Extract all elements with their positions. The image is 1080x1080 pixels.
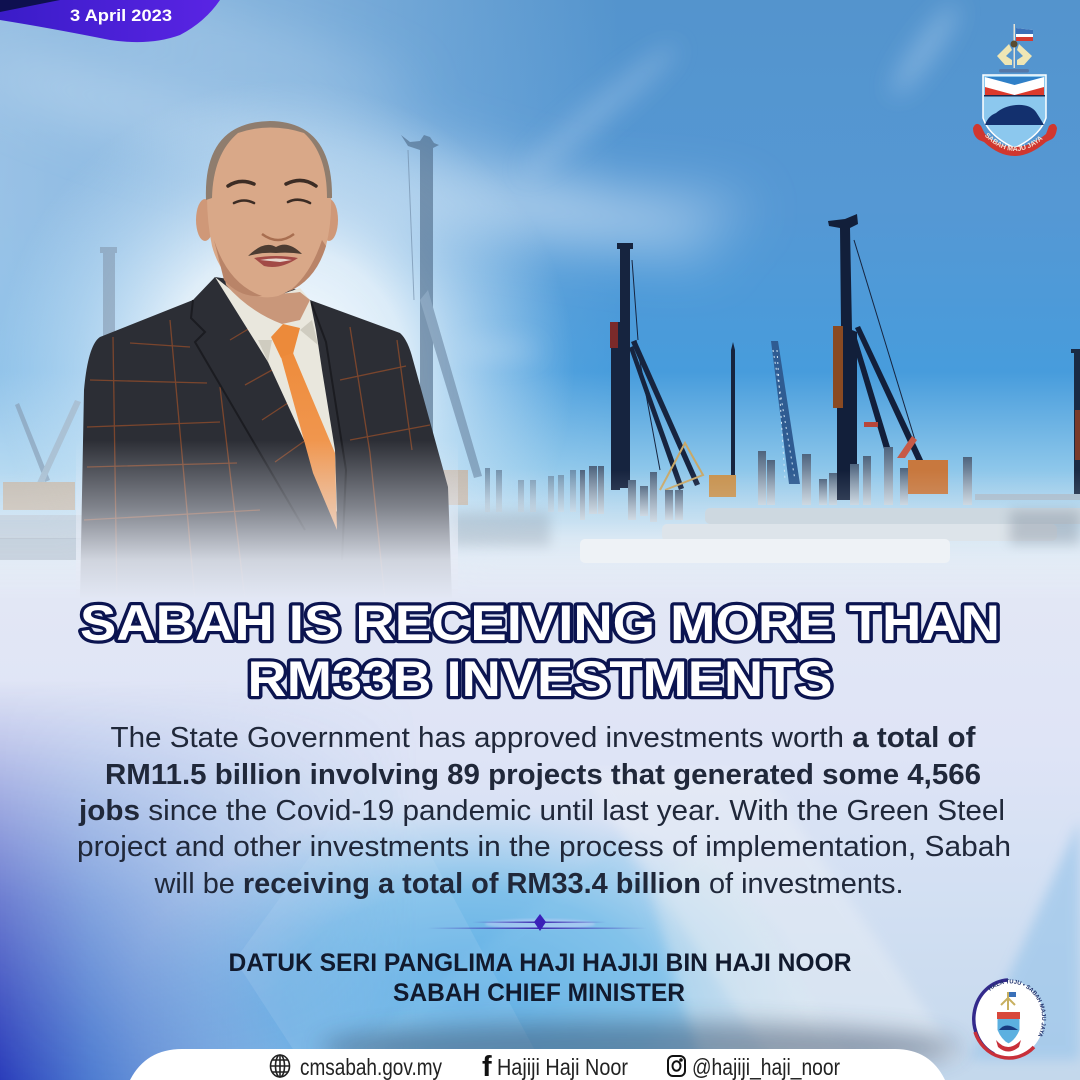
shirt xyxy=(215,277,337,512)
moustache xyxy=(248,245,302,256)
headline xyxy=(80,595,1000,707)
crane A xyxy=(611,243,735,490)
portrait of the chief minister xyxy=(76,121,458,600)
icon: instagram xyxy=(668,1056,685,1076)
construction site with faded cranes xyxy=(3,135,576,512)
ribbon with motto xyxy=(973,124,1057,156)
divider with diamond xyxy=(427,914,647,931)
body paragraph: RM11.5 billion involving 89 projects that generated some 4,566 xyxy=(105,759,981,791)
arms emblem xyxy=(997,44,1032,65)
edge crane xyxy=(1074,350,1080,500)
speaker name and title: DATUK SERI PANGLIMA HAJI HAJIJI BIN HAJI NOOR xyxy=(228,949,852,977)
Sabah state crest: SABAH MAJU JAYA xyxy=(985,133,1043,151)
body paragraph: project and other investments in the process of implementation, Sabah xyxy=(77,831,1011,863)
headline: RM33B INVESTMENTS xyxy=(248,651,832,707)
orange machine xyxy=(709,475,736,497)
body paragraph: The State Government has approved investments worth a total of xyxy=(110,722,976,754)
plaid pattern xyxy=(84,320,430,566)
Hala Tuju seal xyxy=(972,978,1046,1060)
hair xyxy=(206,121,332,200)
distant pipeline xyxy=(975,494,1080,500)
facebook name: Hajiji Haji Noor xyxy=(497,1054,628,1080)
instagram handle: @hajiji_haji_noor xyxy=(692,1054,840,1080)
body paragraph: will be receiving a total of RM33.4 billion of investments. xyxy=(154,868,904,900)
Hala Tuju seal: HALA TUJU • SABAH MAJU JAYA xyxy=(988,979,1046,1036)
shield xyxy=(983,75,1046,148)
date tab: 3 April 2023 xyxy=(70,7,172,25)
portrait fade xyxy=(76,440,458,600)
head xyxy=(207,122,331,297)
collar shadow xyxy=(258,320,318,362)
footer bar xyxy=(130,1049,945,1080)
eyebrows and eyes xyxy=(228,180,316,203)
cheek shading xyxy=(214,240,326,296)
lower panel background xyxy=(0,598,1080,1080)
nose xyxy=(262,234,294,240)
construction site with dark cranes xyxy=(580,214,1080,522)
body paragraph xyxy=(77,722,1011,900)
headline: SABAH IS RECEIVING MORE THAN xyxy=(80,595,1000,651)
Sabah state crest xyxy=(973,24,1057,156)
speaker name and title: SABAH CHIEF MINISTER xyxy=(393,979,685,1007)
mouth xyxy=(254,256,298,267)
icon: globe xyxy=(270,1055,290,1077)
ears xyxy=(196,199,214,241)
date tab xyxy=(0,0,220,42)
website: cmsabah.gov.my xyxy=(300,1054,442,1080)
sky background xyxy=(0,0,1080,600)
stacked pipes xyxy=(0,508,1080,563)
body paragraph: jobs since the Covid-19 pandemic until last year. With the Green Steel xyxy=(78,795,1005,827)
ground fade to white xyxy=(0,470,1080,600)
crane B xyxy=(828,214,924,500)
jacket lapels xyxy=(191,300,346,560)
speaker name and title xyxy=(228,949,852,1007)
lattice crane xyxy=(771,341,800,484)
tie xyxy=(271,324,300,358)
flag and pole xyxy=(1014,24,1015,68)
suit jacket xyxy=(80,277,452,600)
neck xyxy=(222,262,310,324)
pile field xyxy=(580,447,972,522)
